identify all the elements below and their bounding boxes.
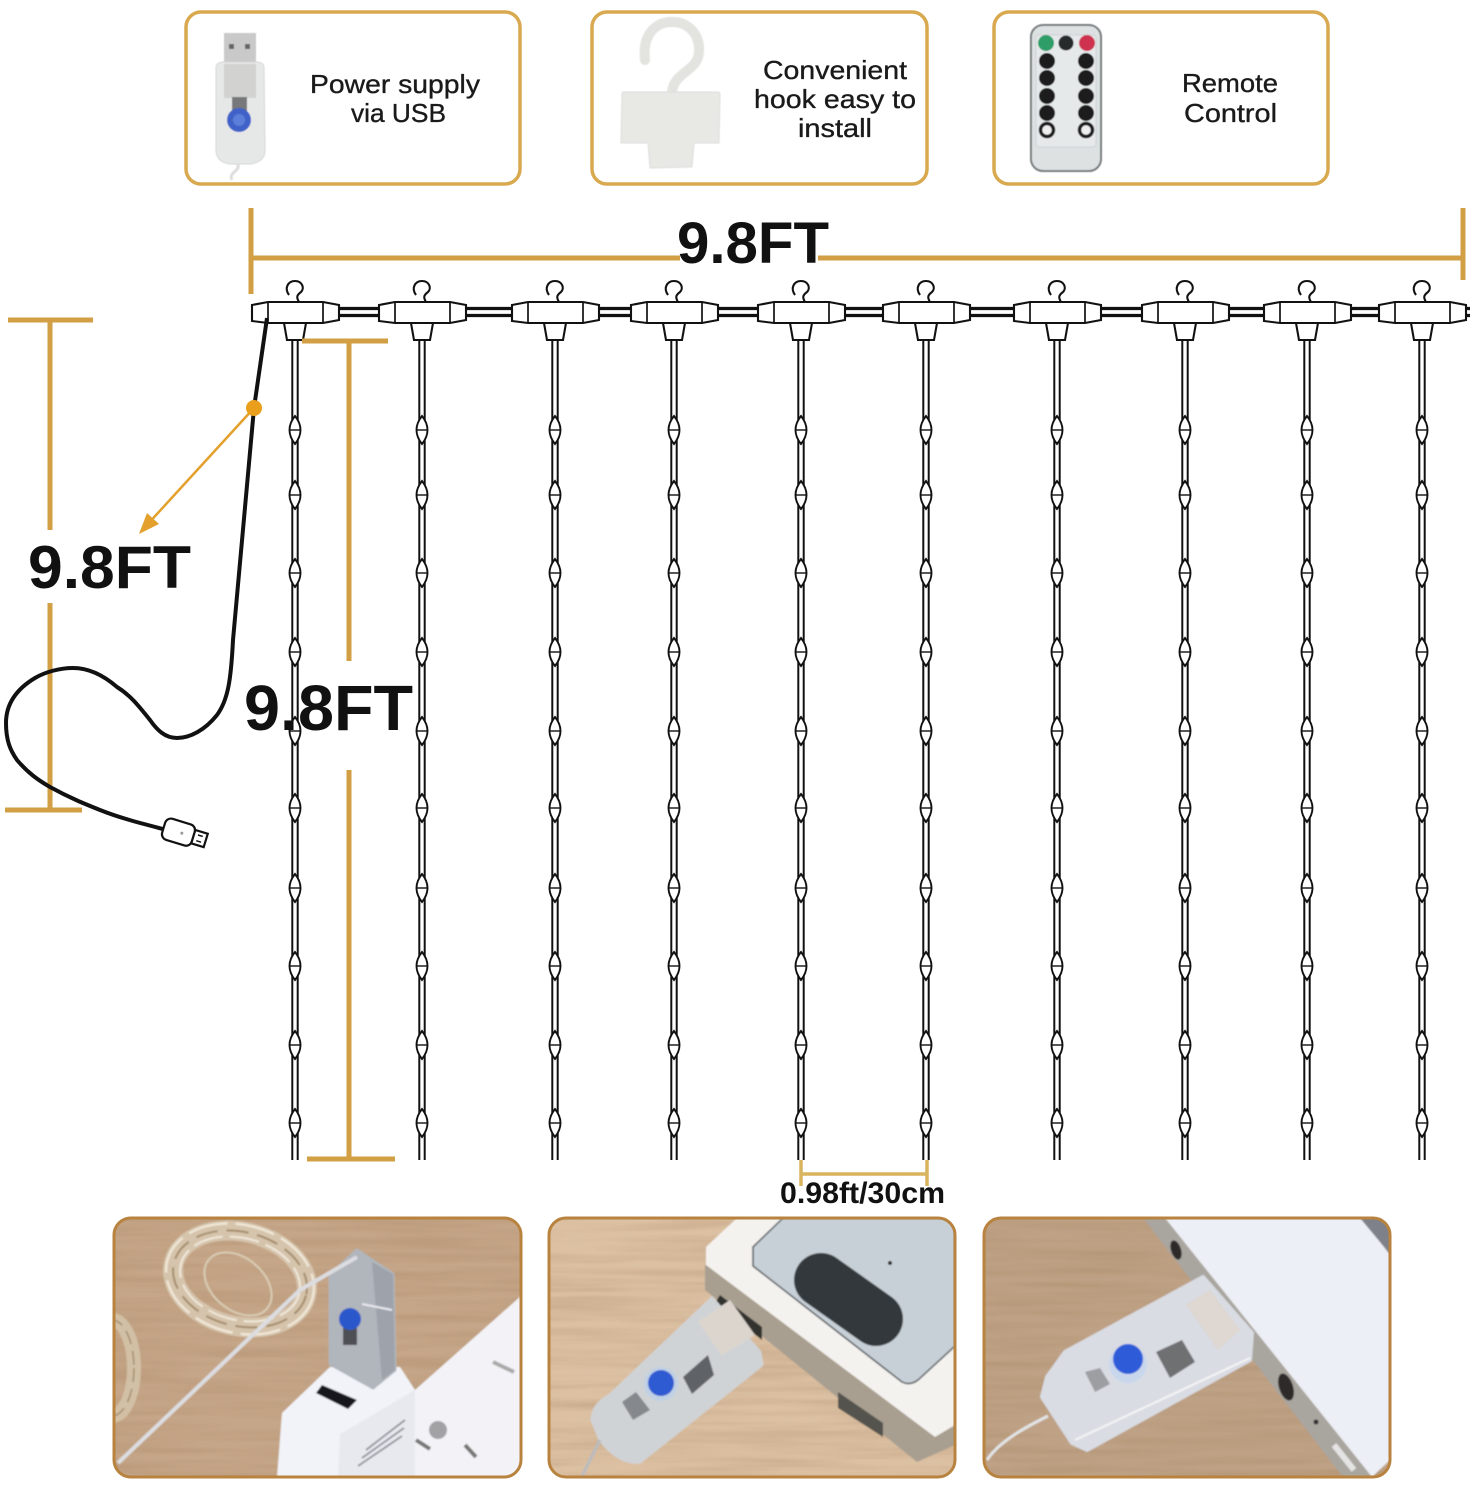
icon: remote [1031, 25, 1101, 171]
text: remote control: Control [1184, 98, 1277, 128]
icon: USB plug [160, 817, 209, 851]
icon: hook connector [621, 22, 720, 168]
panel: remote control [994, 12, 1328, 184]
power bank button [821, 1280, 876, 1319]
text: convenient hook easy to install: install [798, 113, 872, 143]
port [838, 1392, 883, 1437]
dongle [1042, 1277, 1252, 1450]
text: convenient hook easy to install [754, 55, 916, 143]
text: power supply via USB: via USB [351, 98, 446, 128]
arrow: cable length pointer [139, 400, 262, 534]
USB cable [6, 318, 267, 851]
cable wire between connectors [339, 308, 1470, 316]
label: spacing: 0.98ft/30cm [780, 1177, 945, 1210]
dongle [592, 1298, 762, 1462]
width dimension [251, 208, 1463, 294]
laptop lid [1165, 1218, 1390, 1477]
wire [118, 1257, 357, 1463]
curtain drop dimension [244, 341, 413, 1159]
wire coil [116, 1220, 318, 1423]
label: width: 9.8FT [677, 211, 829, 276]
photo: dongle in power bank [549, 1218, 955, 1477]
text: remote control: Remote [1182, 68, 1278, 98]
power bank [705, 1265, 955, 1462]
photo: dongle in wall charger [90, 1208, 521, 1477]
text: convenient hook easy to install: Convenient [763, 55, 908, 85]
label: curtain drop: 9.8FT [244, 672, 413, 744]
icon: USB dongle [216, 33, 265, 180]
light strands with hook connectors [252, 281, 1466, 1160]
text: power supply via USB [310, 69, 480, 128]
panel: convenient hook [592, 12, 927, 184]
photo: dongle in laptop [984, 1218, 1390, 1477]
spacing dimension [780, 1160, 945, 1210]
label: cable length: 9.8FT [28, 534, 191, 601]
text: convenient hook easy to install: hook easy to [754, 84, 916, 114]
charger [277, 1367, 415, 1477]
text: power supply via USB: Power supply [310, 69, 480, 99]
laptop ports [1170, 1240, 1182, 1260]
dongle [330, 1250, 395, 1388]
left cable length dimension [5, 320, 191, 810]
laptop edge [1143, 1218, 1372, 1477]
wall socket [415, 1296, 521, 1477]
panel: power supply via USB [186, 12, 520, 184]
text: remote control [1182, 68, 1278, 128]
